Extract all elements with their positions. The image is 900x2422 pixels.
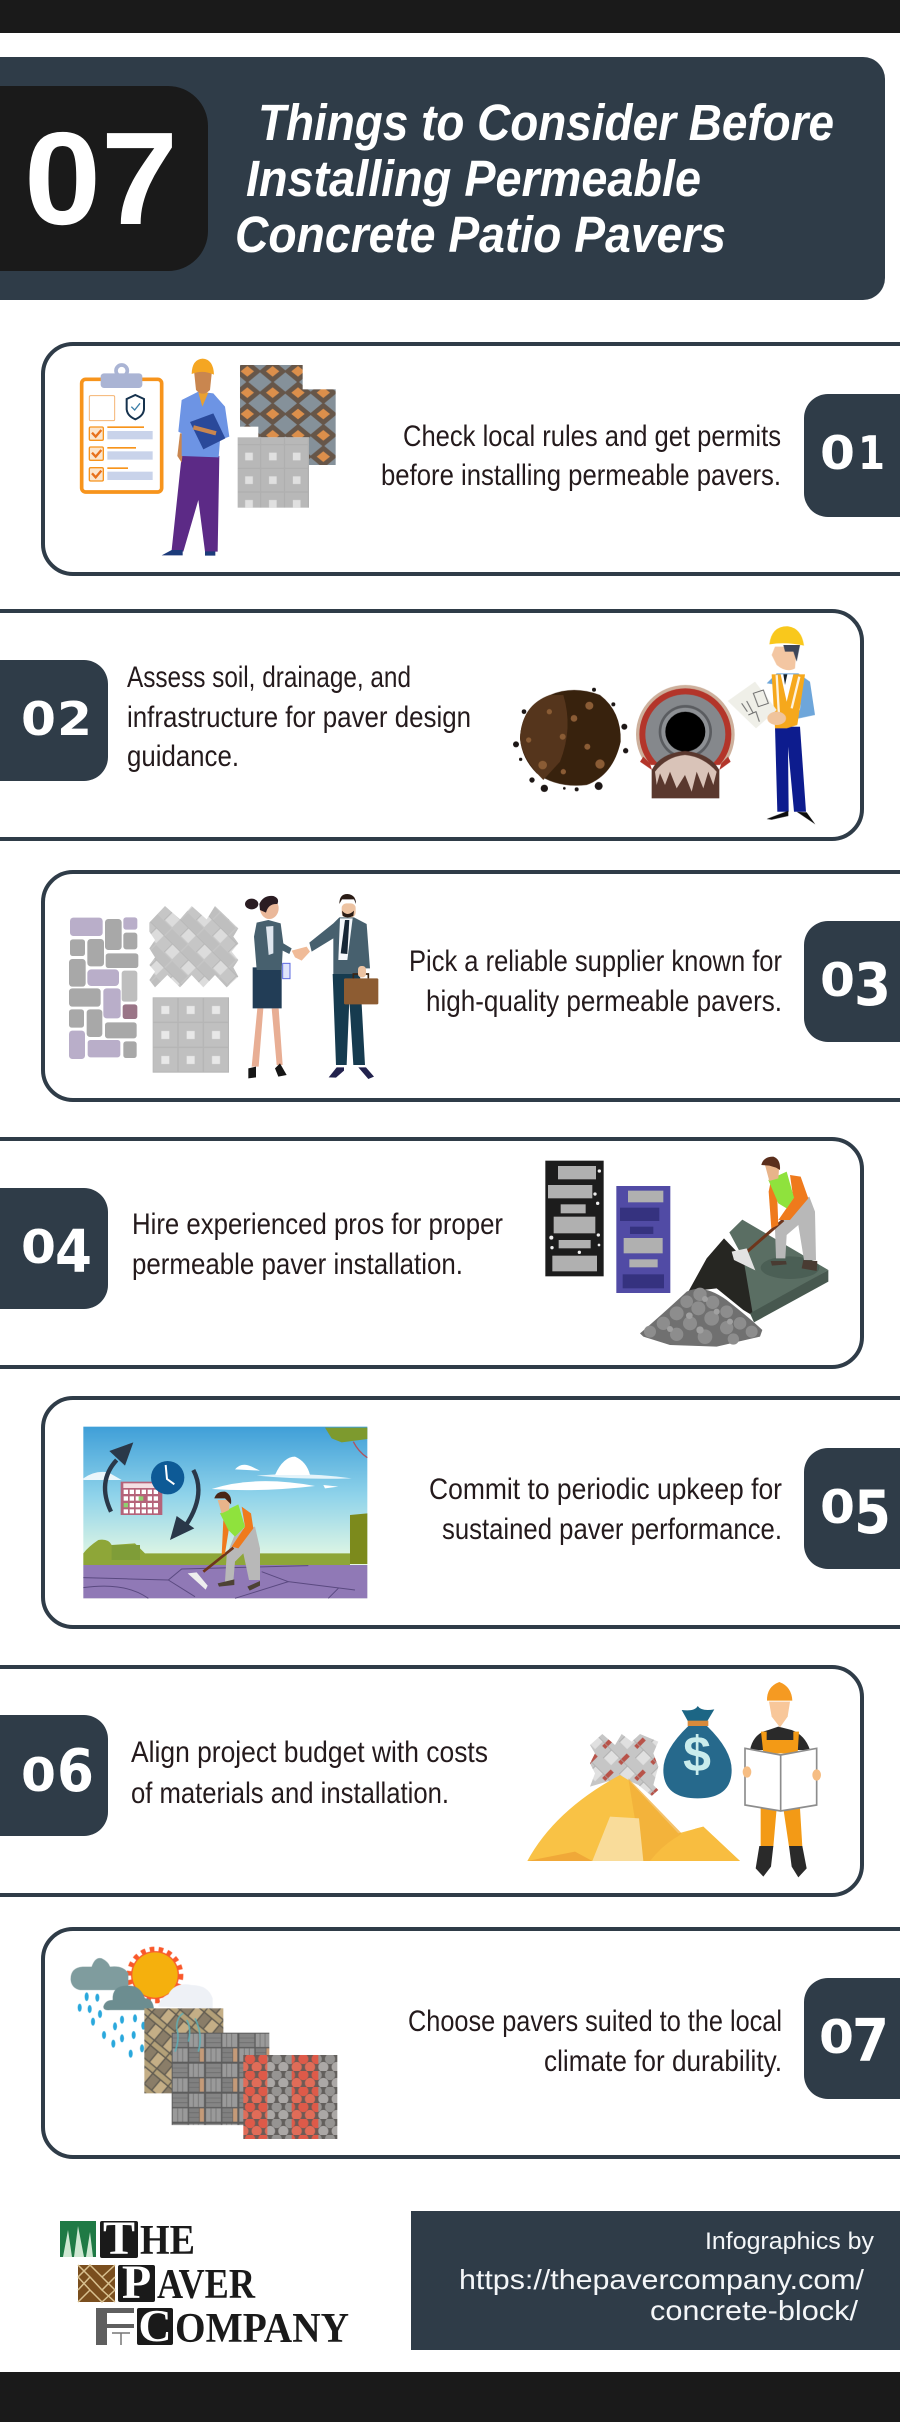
step 02 text xyxy=(127,661,471,773)
panel: step 01 xyxy=(43,344,900,574)
step 07 text: climate for durability. xyxy=(544,2045,782,2078)
step 06 number xyxy=(0,1715,108,1836)
step 04 text: permeable paver installation. xyxy=(132,1248,463,1281)
step 03 number: 3 xyxy=(854,950,891,1019)
top bar xyxy=(0,0,900,33)
footer credit box: https://thepavercompany.com/ xyxy=(459,2264,864,2295)
logo: The Paver Company: T xyxy=(103,2212,135,2265)
step 07 text: Choose pavers suited to the local xyxy=(408,2005,782,2038)
step 01 number: 1 xyxy=(858,426,885,480)
step 06 number: 6 xyxy=(57,1736,94,1805)
step 05 text xyxy=(429,1473,782,1546)
step 02 number xyxy=(0,660,108,781)
step 06 number: 0 xyxy=(21,1748,56,1802)
logo: The Paver Company: OMPANY xyxy=(175,2306,349,2352)
logo: The Paver Company: P xyxy=(122,2256,151,2309)
step 07 number: 7 xyxy=(852,2006,889,2075)
step 03 text: high-quality permeable pavers. xyxy=(426,985,782,1018)
step 05 text: Commit to periodic upkeep for xyxy=(429,1473,782,1506)
step 03 text xyxy=(409,945,782,1018)
logo: The Paver Company: C xyxy=(138,2300,172,2351)
step 05 number xyxy=(804,1448,900,1569)
step 04 number xyxy=(0,1188,108,1309)
step 04 text: Hire experienced pros for proper xyxy=(132,1208,503,1241)
step 06 text xyxy=(131,1736,488,1810)
step 04 text xyxy=(132,1208,503,1281)
panel: step 07 xyxy=(43,1929,900,2157)
bottom bar xyxy=(0,2372,900,2422)
step 07 text xyxy=(408,2005,782,2078)
footer credit box: concrete-block/ xyxy=(650,2295,858,2326)
step 02 text: guidance. xyxy=(127,740,239,773)
step 02 text: infrastructure for paver design xyxy=(127,701,471,734)
step 05 number: 5 xyxy=(854,1478,891,1548)
title: Things to Consider Before xyxy=(258,94,834,151)
step 02 number: 0 xyxy=(21,692,56,746)
title: Concrete Patio Pavers xyxy=(235,206,726,263)
step 05 illustration: maintenance scene with calendar and clock xyxy=(83,1427,367,1598)
step 07 number xyxy=(804,1978,900,2099)
step 03 illustration: paver samples and supplier handshake xyxy=(69,894,378,1079)
footer credit box: Infographics by xyxy=(705,2228,874,2255)
step 07 number: 0 xyxy=(819,2010,854,2064)
step 01 text xyxy=(381,420,781,492)
step 01 text: Check local rules and get permits xyxy=(403,420,781,453)
step 06 text: Align project budget with costs xyxy=(131,1736,488,1769)
step 05 number: 0 xyxy=(820,1480,855,1534)
number badge: 07 xyxy=(24,105,178,252)
step 02 number: 2 xyxy=(57,692,92,746)
panel: step 06 xyxy=(0,1667,862,1895)
number badge xyxy=(0,86,208,271)
step 02 text: Assess soil, drainage, and xyxy=(127,661,411,694)
step 01 illustration: permit checklist, inspector and paver samples xyxy=(82,359,336,556)
step 06 illustration: sand pile, money bag and builder with plans xyxy=(527,1682,821,1877)
panel: step 03 xyxy=(43,872,900,1100)
step 06 illustration: sand pile, money bag and builder with plans: $ xyxy=(683,1727,711,1783)
step 01 number xyxy=(804,394,900,517)
panel: step 05 xyxy=(43,1398,900,1627)
header banner xyxy=(0,57,885,300)
step 03 number: 0 xyxy=(820,953,855,1007)
step 01 text: before installing permeable pavers. xyxy=(381,459,781,492)
step 04 number: 0 xyxy=(21,1220,56,1274)
step 07 illustration: weather icons and paver swatches xyxy=(71,1949,337,2139)
step 02 illustration: soil sample, drain pipe and engineer xyxy=(513,626,815,824)
footer credit box xyxy=(411,2211,900,2350)
step 04 number: 4 xyxy=(55,1217,92,1286)
title xyxy=(235,94,834,263)
step 06 text: of materials and installation. xyxy=(131,1777,449,1810)
logo: The Paver Company: AVER xyxy=(157,2262,256,2308)
title: Installing Permeable xyxy=(246,150,701,207)
step 01 number: 0 xyxy=(820,426,855,480)
step 04 illustration: paver samples and worker shovelling gravel xyxy=(545,1157,828,1347)
logo: The Paver Company: HE xyxy=(140,2218,195,2264)
panel: step 02 xyxy=(0,611,862,839)
panel: step 04 xyxy=(0,1139,862,1367)
step 03 text: Pick a reliable supplier known for xyxy=(409,945,782,978)
logo: The Paver Company xyxy=(60,2212,349,2352)
step 03 number xyxy=(804,921,900,1042)
step 05 text: sustained paver performance. xyxy=(442,1513,782,1546)
